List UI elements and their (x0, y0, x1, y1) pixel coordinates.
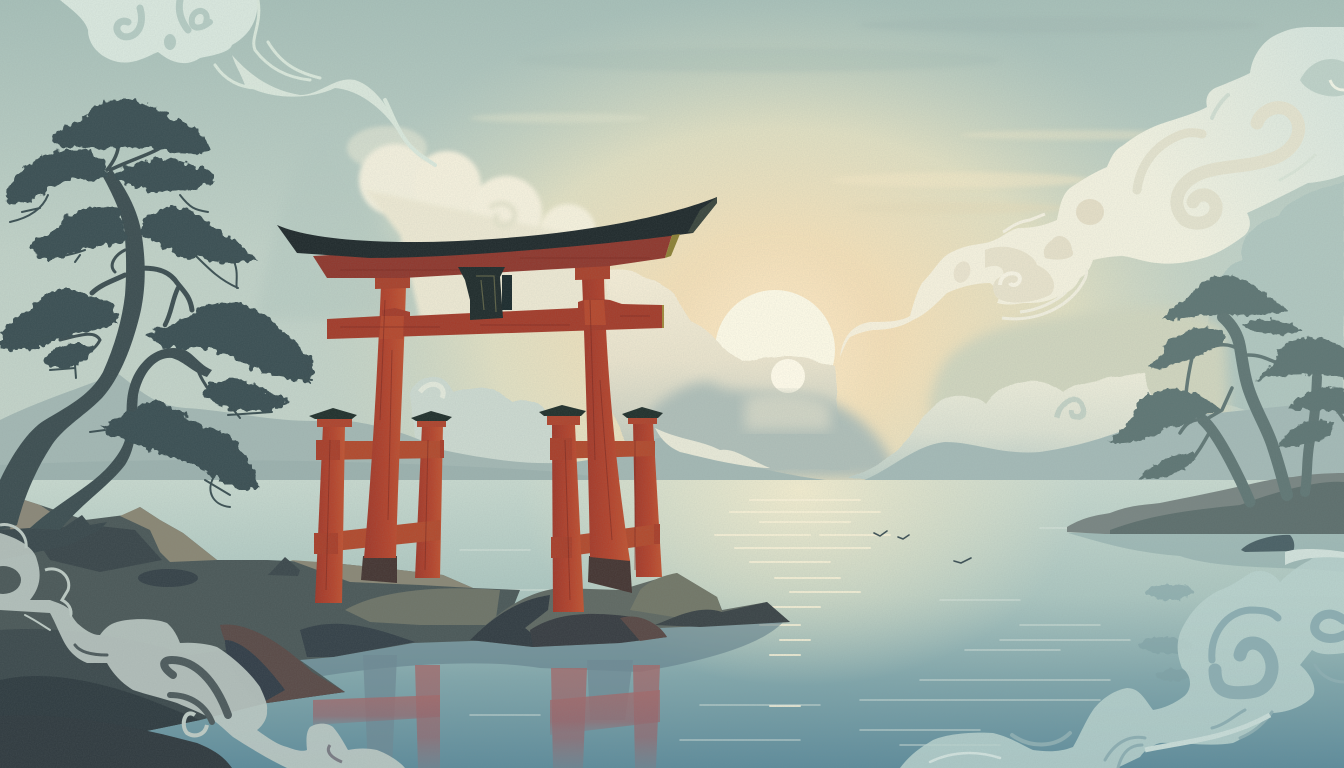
brown boulder (220, 624, 345, 703)
sun (685, 260, 865, 440)
twigs: left pines (10, 195, 312, 507)
grey cloud layer below sun (640, 359, 900, 478)
trunk: lower left pine (30, 348, 212, 530)
main pillars (364, 278, 630, 561)
torii reflection (313, 655, 660, 768)
pillar head blocks (317, 415, 657, 427)
island and shore water reflection (300, 620, 785, 680)
back secondary pillars (415, 422, 662, 578)
hole: bottom left cloud (0, 566, 21, 594)
right island (1067, 473, 1344, 552)
central plaque (458, 267, 505, 320)
foliage: left pines (3, 101, 311, 488)
rock in water (1241, 535, 1294, 552)
inner swirl bands: top right cloud (1137, 95, 1315, 223)
foreground dark rock (0, 715, 232, 768)
right low cloud (848, 372, 1180, 478)
branches: left pines (60, 140, 218, 445)
small cloud behind torii (410, 377, 560, 470)
right grey cloud tower (1207, 180, 1344, 440)
tan cloud mass right of sun (930, 307, 1230, 440)
sun glints on water (715, 500, 890, 706)
inner swirl bands: bottom right cloud (930, 610, 1344, 768)
right island water reflection (1068, 533, 1344, 572)
pillar caps (309, 405, 663, 421)
cloud wisp on mountain ridge (655, 428, 770, 468)
faint water ripples (460, 528, 1130, 745)
upper red beam (313, 235, 672, 278)
distant mountains right (864, 400, 1344, 482)
dark tree shadow on shore (30, 525, 162, 572)
right pines (1111, 277, 1344, 502)
brace collars (314, 438, 660, 558)
roots on shore (0, 515, 107, 560)
trunks: right pines (1180, 317, 1344, 502)
ribbon tail (232, 55, 400, 135)
cross braces (315, 441, 658, 558)
lower-left swirl: top right cloud (985, 247, 1054, 302)
lower strata (0, 629, 345, 740)
swirl cloud top left (60, 0, 435, 165)
torii gate (277, 197, 717, 612)
front secondary pillars (315, 425, 584, 612)
cream cloud bank behind torii (605, 271, 850, 470)
distant mountains left (0, 373, 826, 482)
distant grey clouds (255, 121, 1344, 440)
lit rock shelf (345, 588, 500, 625)
water (0, 480, 1344, 768)
birds (874, 531, 971, 563)
main pillar collars (375, 271, 410, 289)
swirl cloud bottom right (900, 549, 1344, 768)
cream cloud upper middle (347, 126, 610, 318)
tan ridge (120, 507, 217, 562)
reflected pine in water (1139, 584, 1195, 681)
swirl cloud top right (840, 27, 1344, 357)
dark strip behind plaque (502, 275, 512, 310)
roof (277, 197, 717, 258)
left shore rocks (0, 497, 520, 768)
swirl cloud bottom left (0, 525, 405, 768)
main pillar bases (361, 556, 397, 583)
wood grain lines (326, 258, 650, 600)
left pine trees (0, 101, 312, 530)
lower tie beam (327, 298, 664, 339)
torii island rocks (470, 573, 790, 647)
sky background (0, 0, 1344, 500)
inner swirl bands: bottom left cloud (25, 615, 228, 722)
shore main mass (0, 497, 520, 740)
trunk: main left pine (0, 170, 145, 530)
foliage: right pines (1111, 277, 1344, 477)
